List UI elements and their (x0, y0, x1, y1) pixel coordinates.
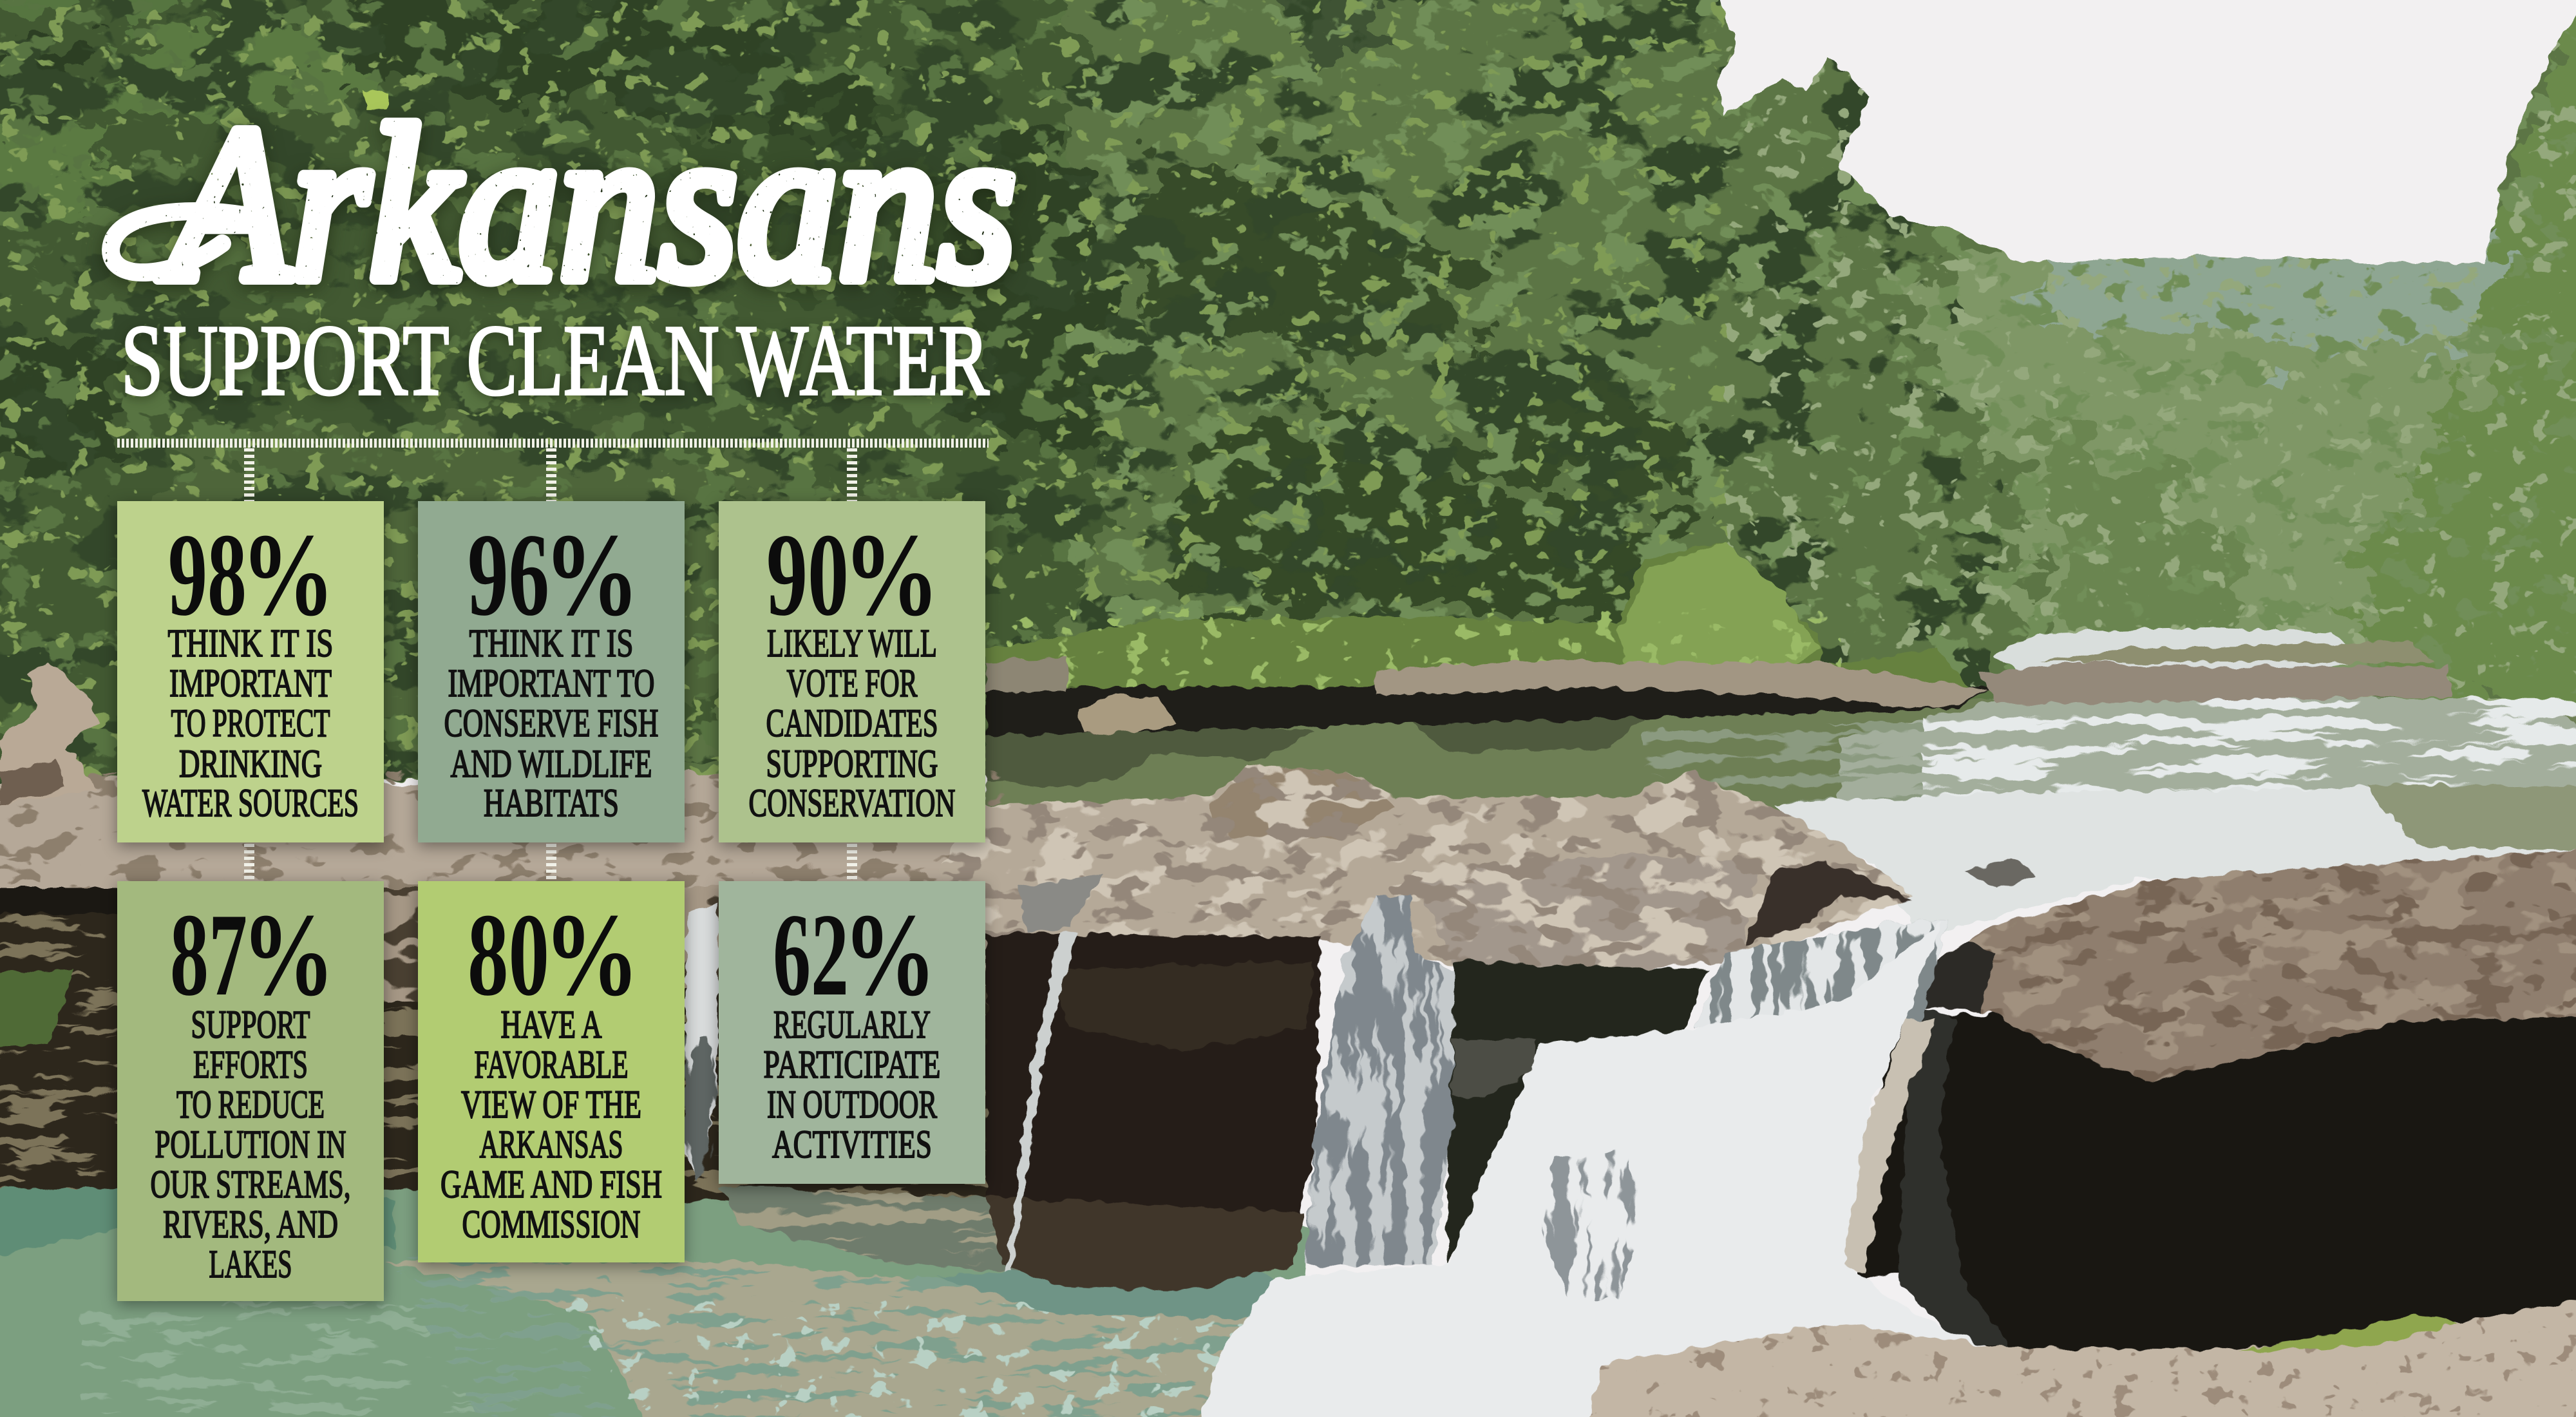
description: FAVORABLE (474, 1043, 629, 1087)
dotted rule and connectors (117, 443, 989, 881)
description (764, 1003, 940, 1166)
description: IN OUTDOOR (767, 1083, 937, 1127)
description: TO PROTECT (171, 702, 330, 745)
pool tan shallows (388, 1262, 1265, 1417)
far rapids (1996, 627, 2365, 674)
teal shoal (936, 1265, 1298, 1318)
riverside grass and bush (986, 542, 1971, 698)
driftwood (0, 662, 99, 805)
description: ACTIVITIES (772, 1123, 932, 1166)
river pool (986, 698, 2576, 822)
description: DRINKING (179, 743, 322, 786)
grass on rock (2234, 1315, 2461, 1351)
distant hills (2021, 230, 2530, 353)
description (748, 622, 956, 825)
description: POLLUTION IN (155, 1123, 346, 1166)
panel background (719, 501, 985, 842)
description: AND WILDLIFE (451, 743, 652, 786)
description: CONSERVE FISH (444, 702, 658, 745)
shadowed lower left bank (0, 830, 1002, 1232)
main fall (1191, 922, 1993, 1417)
description: VOTE FOR (787, 662, 918, 705)
stat: 90%: % (843, 509, 940, 640)
description (142, 622, 359, 825)
panel background (418, 881, 685, 1262)
ledge shadow (986, 687, 1996, 736)
stat: 62%: % (843, 889, 936, 1020)
description (151, 1003, 350, 1286)
description: SUPPORTING (766, 743, 938, 786)
panel: 90% (719, 501, 985, 842)
stat: 96%: 96 (468, 509, 549, 640)
description: HABITATS (484, 782, 619, 825)
stat: 80%: % (544, 889, 639, 1020)
panel: 80% (418, 881, 685, 1262)
description (440, 1003, 662, 1246)
stat: 62%: 62 (773, 889, 849, 1020)
dark recess under rock (986, 933, 1321, 1224)
description: WATER SOURCES (142, 782, 359, 825)
mid-tone patches left (115, 17, 378, 115)
stat: 80% (468, 889, 639, 1020)
description: THINK IT IS (469, 622, 634, 665)
thin left fall (1005, 930, 1077, 1273)
stat: 87%: % (242, 889, 335, 1020)
big rock shelf (920, 756, 1938, 986)
valley mid-tone (2037, 411, 2251, 657)
stat: 96%: % (544, 509, 639, 640)
stat: 80%: 80 (468, 889, 549, 1020)
grey wet shelf (719, 1186, 1019, 1273)
description: PARTICIPATE (764, 1043, 940, 1087)
description: EFFORTS (193, 1043, 308, 1087)
dark wet rock base (986, 1196, 1306, 1291)
right rock (1889, 838, 2576, 1101)
round boulder (1076, 695, 1178, 733)
right foliage (2341, 0, 2576, 756)
small fall between cards (683, 904, 718, 1183)
panel: 98% (117, 501, 384, 842)
description: VIEW OF THE (461, 1083, 641, 1127)
foliage mass (0, 0, 2576, 822)
panel background (117, 501, 384, 842)
panel background (719, 881, 985, 1184)
description: OUR STREAMS, (151, 1163, 350, 1206)
description: IMPORTANT (169, 662, 332, 705)
description: SUPPORT (191, 1003, 310, 1047)
stat: 98%: % (241, 509, 335, 640)
description: TO REDUCE (176, 1083, 325, 1127)
foliage tone map (0, 0, 2576, 822)
stat: 90%: 90 (766, 509, 849, 640)
description: COMMISSION (462, 1203, 640, 1246)
far ledge rocks (986, 657, 1068, 694)
panel background (117, 881, 384, 1301)
stat: 90% (766, 509, 940, 640)
bright rapids (1774, 785, 2576, 937)
description: LAKES (209, 1243, 292, 1286)
dark left foliage (0, 0, 1117, 822)
right cave (1857, 986, 2576, 1356)
panel: 87% (117, 881, 384, 1301)
stat: 96% (468, 509, 639, 640)
panel: 62% (719, 881, 985, 1184)
description: LIKELY WILL (767, 622, 937, 665)
description (444, 622, 658, 825)
panel background (418, 501, 685, 842)
pool streaks (388, 1257, 1282, 1417)
subtitle: support clean water: SUPPORT CLEAN WATER (121, 304, 989, 416)
description: CONSERVATION (748, 782, 956, 825)
second fall (1306, 895, 1454, 1265)
panel: 96% (418, 501, 685, 842)
title: Arkansans: Arkansans (156, 81, 1016, 327)
foliage light and dark flecks (0, 0, 2004, 805)
left bank rock (0, 772, 1019, 928)
description: RIVERS, AND (163, 1203, 338, 1246)
upper centre fall (1696, 920, 1947, 1052)
bottom rock (1582, 1290, 2576, 1417)
pool dark teal edge (0, 1190, 394, 1265)
description: HAVE A (501, 1003, 601, 1047)
dark overhang (1745, 862, 1914, 945)
description: CANDIDATES (766, 702, 938, 745)
description: REGULARLY (773, 1003, 931, 1047)
pool base (0, 1190, 1314, 1417)
stat: 98%: 98 (168, 509, 247, 640)
dark foliage blobs (348, 0, 887, 140)
description: IMPORTANT TO (448, 662, 654, 705)
centre recess (1446, 961, 1709, 1265)
description: THINK IT IS (167, 622, 334, 665)
description: ARKANSAS (479, 1123, 623, 1166)
pale valley foliage (1889, 247, 2563, 674)
description: GAME AND FISH (440, 1163, 662, 1206)
pool faint ripples (82, 1298, 657, 1413)
stat: 87%: 87 (170, 889, 247, 1020)
